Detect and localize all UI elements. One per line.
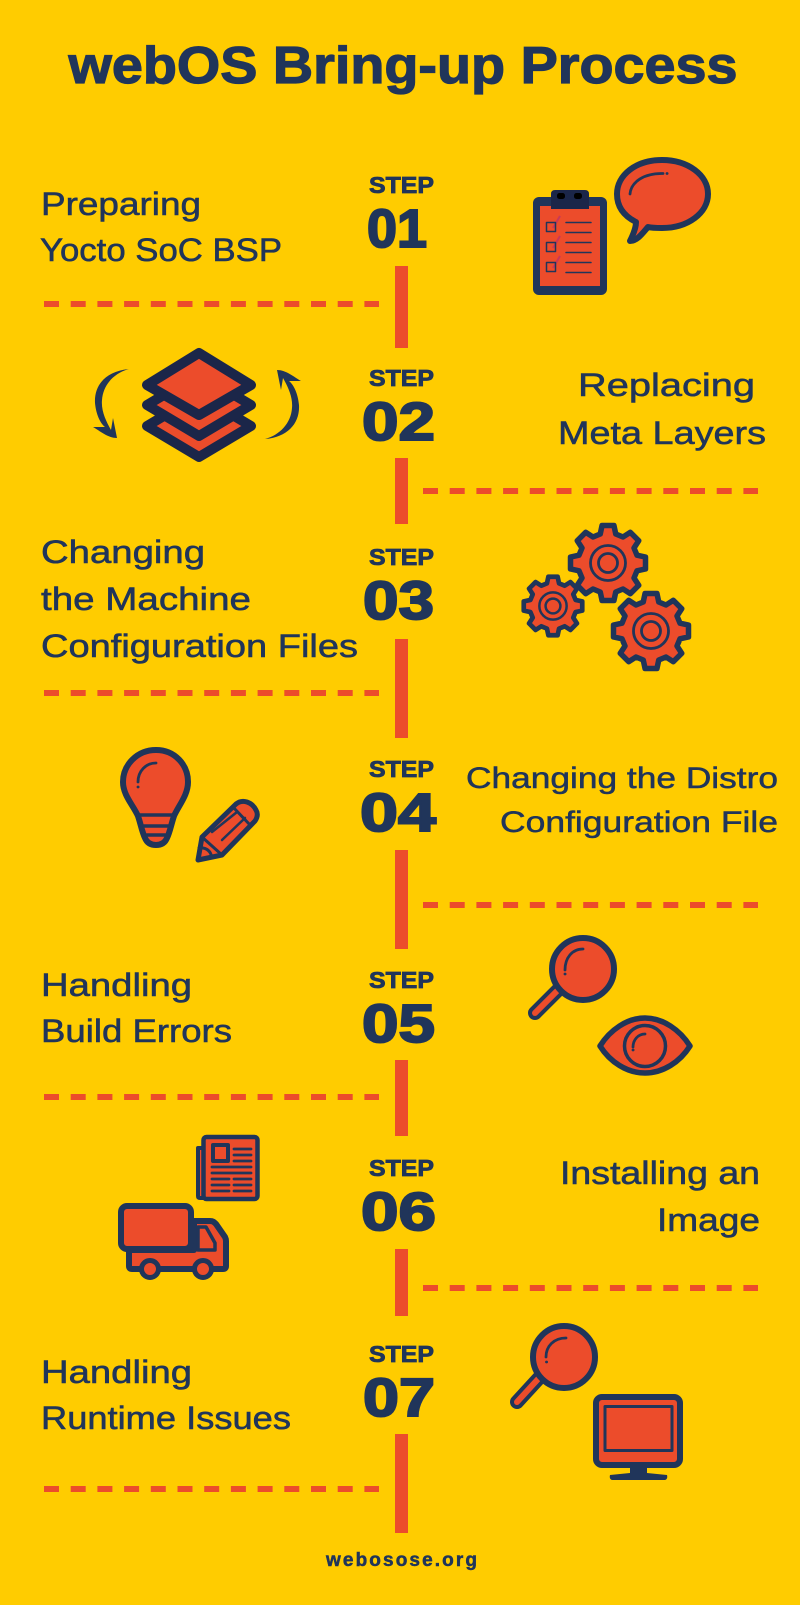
icon: light bulb: [123, 750, 188, 845]
step 06 label: 06: [361, 1182, 436, 1242]
step 07 text: Handling: [41, 1354, 192, 1390]
icon: rotation arrows: [93, 369, 301, 439]
step 07 text: [41, 1354, 291, 1436]
step 02 label: 02: [362, 392, 435, 452]
step 04 text: [466, 762, 778, 839]
step 06 text: Installing an: [560, 1155, 760, 1191]
step 05 text: [41, 967, 232, 1049]
footer url: webosose.org: [325, 1550, 477, 1571]
step 05 label: 05: [362, 994, 435, 1054]
step 04 label: [360, 756, 436, 843]
timeline: central vertical bar: [395, 266, 408, 1533]
step 07 text: Runtime Issues: [41, 1400, 291, 1436]
step 03 text: Changing: [41, 534, 205, 570]
step 01 text: Yocto SoC BSP: [40, 232, 282, 268]
icon: computer monitor: [596, 1397, 680, 1480]
step 03 text: the Machine: [41, 581, 251, 617]
step 07 label: STEP: [369, 1341, 434, 1367]
step 01 label: [367, 172, 434, 259]
step 02 text: Meta Layers: [558, 415, 766, 451]
step 04 text: Configuration File: [500, 806, 778, 839]
icon: eye: [600, 1018, 690, 1073]
step 06 text: Image: [657, 1202, 760, 1238]
title: webOS Bring-up Process: [67, 37, 738, 95]
step 03 text: Configuration Files: [41, 628, 358, 664]
step 03 label: [363, 544, 434, 631]
icon: magnifying glass: [535, 938, 614, 1013]
step 06 label: STEP: [369, 1155, 434, 1181]
step 03 text: [41, 534, 358, 664]
step 05 text: Handling: [41, 967, 192, 1003]
step 01 text: Preparing: [41, 186, 201, 222]
icon: pencil: [198, 801, 257, 860]
step 02 label: STEP: [369, 365, 434, 391]
step 04 label: STEP: [369, 756, 434, 782]
step 01 label: 01: [367, 199, 427, 259]
step 04 text: Changing the Distro: [466, 762, 778, 795]
icon: speech bubble: [617, 160, 708, 241]
step 01 label: STEP: [369, 172, 434, 198]
icon: clipboard checklist: [533, 190, 607, 295]
step 02 text: [558, 367, 766, 451]
icon: gears: [524, 526, 688, 668]
icon: stacked layers: [147, 353, 251, 457]
step 04 label: 04: [360, 783, 436, 843]
step 07 label: [363, 1341, 435, 1428]
step 02 label: [362, 365, 435, 452]
step 06 label: [361, 1155, 436, 1242]
step 06 text: [560, 1155, 760, 1238]
step 05 text: Build Errors: [41, 1013, 232, 1049]
step 03 label: STEP: [369, 544, 434, 570]
icon: delivery truck: [121, 1206, 226, 1278]
step 03 label: 03: [363, 571, 434, 631]
step 05 label: [362, 967, 435, 1054]
step 01 text: [40, 186, 282, 268]
step 05 label: STEP: [369, 967, 434, 993]
step 07 label: 07: [363, 1368, 435, 1428]
step 02 text: Replacing: [578, 367, 755, 403]
icon: magnifying glass 2: [517, 1326, 595, 1402]
icon: newspaper: [198, 1137, 258, 1199]
